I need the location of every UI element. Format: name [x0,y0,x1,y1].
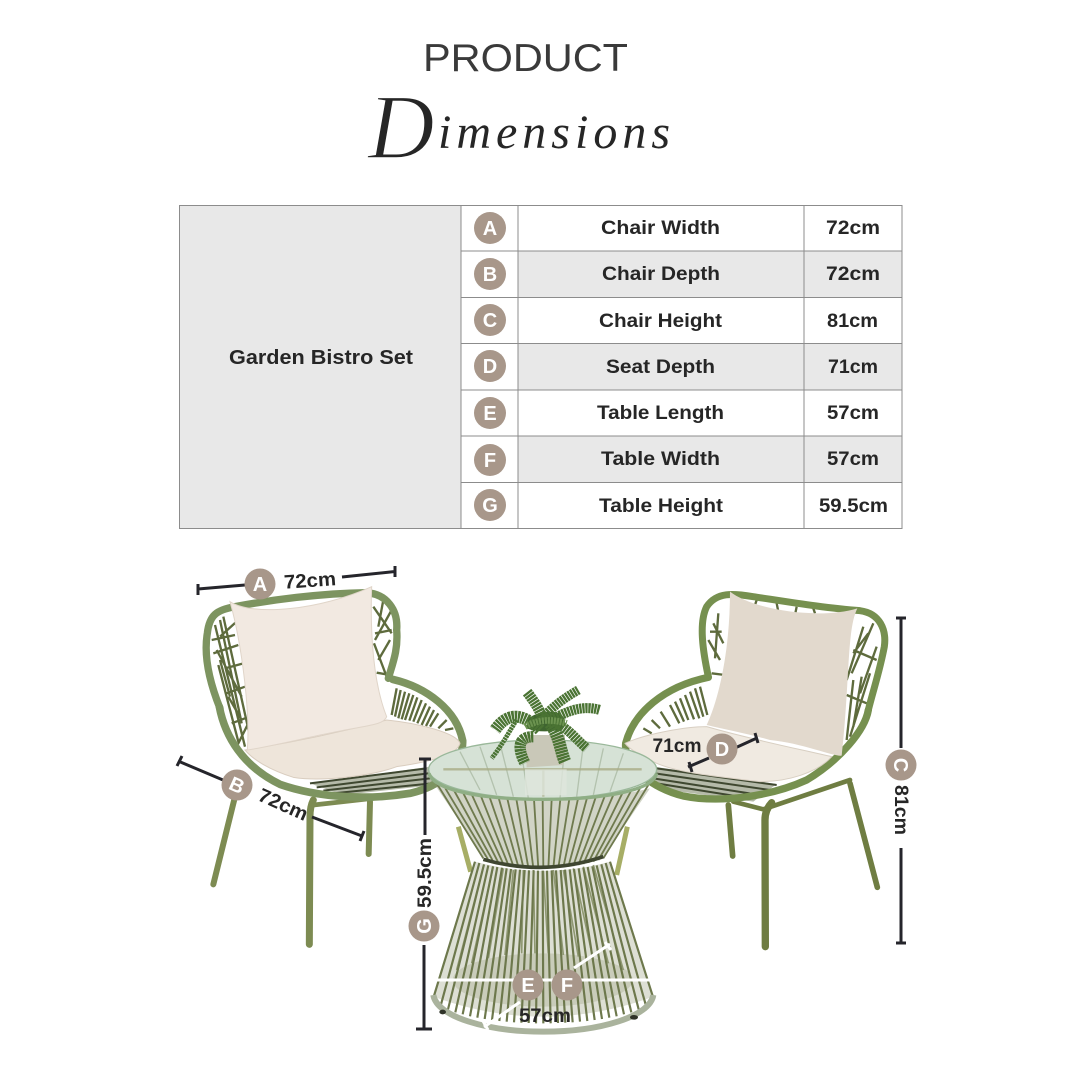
dimension D seat depth: D [715,739,729,761]
dimension B chair depth: 72cm [255,784,311,826]
table row shading [180,206,902,528]
chair frame [206,593,463,797]
row F: F [484,450,496,472]
row F: Table Width [601,449,720,470]
table glass top [429,740,657,799]
heading: dimensions script: D [366,76,434,178]
glass see-through spokes [460,743,623,798]
row D [474,350,878,382]
lower spokes [433,862,653,1023]
dimension A chair width [198,566,395,600]
glass pale reflection [525,769,567,795]
dimensions table [180,205,902,528]
heading: dimensions script: imensions [438,106,675,159]
row A [474,212,880,244]
dimension G table height [408,759,440,1029]
row F [474,444,879,476]
table feet [439,1010,638,1020]
dimension G table height: G [414,918,436,934]
flower pot [525,735,565,767]
table waist [483,857,603,867]
back weave [643,600,877,740]
table upper bowl [435,785,650,867]
row G [474,489,888,521]
seat cushion [625,727,832,782]
chair legs [728,780,877,947]
row C [474,304,878,336]
seat slats [653,767,777,802]
row C: 81cm [827,311,878,332]
heading: product: PRODUCT [423,37,628,80]
dimensions E and F table size: E [521,975,535,997]
seat cushion [245,720,460,779]
lower cone shading [433,862,653,1017]
lower cage back spokes [457,865,623,970]
row B: B [483,264,497,286]
left chair [206,587,463,944]
row D: D [483,356,497,378]
dimension D seat depth [652,733,758,772]
row A: 72cm [826,218,880,239]
row B: 72cm [826,264,880,285]
base ring [433,995,653,1032]
row D: 71cm [828,357,878,378]
dimensions E and F table size: 57cm [519,1005,571,1027]
dimension C chair height [886,618,916,943]
dimension D seat depth: 71cm [652,735,702,757]
row A: Chair Width [601,218,720,239]
dimension B chair depth [177,756,364,841]
base ring inner [453,953,633,1007]
row F: 57cm [827,449,879,470]
dimensions E and F table size [433,942,652,1030]
right chair [625,592,885,947]
dimension C chair height: C [889,758,911,772]
row D: Seat Depth [606,357,715,378]
upper spokes [437,783,648,869]
row G: G [482,495,498,517]
back cushion [707,592,857,756]
chair frame [626,594,885,799]
back weave [212,600,453,747]
row B [474,258,880,290]
dimension C chair height: 81cm [890,785,912,835]
row E: E [483,403,497,425]
table product name: Garden Bistro Set [229,347,413,369]
plant fronds [492,690,600,763]
glass crossbar reflections [443,768,642,797]
back cushion [230,587,387,750]
dimension B chair depth: B [226,773,248,799]
row G: 59.5cm [819,496,888,517]
row A: A [483,218,497,240]
rear chair legs [458,827,627,875]
dimension A chair width: A [253,574,267,596]
row E [474,397,879,429]
row B: Chair Depth [602,264,720,285]
seat slats [310,767,435,795]
dimension A chair width: 72cm [283,568,337,594]
row C: C [483,310,497,332]
dimension G table height: 59.5cm [414,838,436,908]
glass table with plant [429,690,657,1032]
row E: 57cm [827,403,879,424]
glass rim [429,773,657,799]
dimensions E and F table size: F [561,975,573,997]
chair legs [213,797,373,944]
row E: Table Length [597,403,724,424]
title [366,37,675,178]
row C: Chair Height [599,311,723,332]
row G: Table Height [599,496,724,517]
